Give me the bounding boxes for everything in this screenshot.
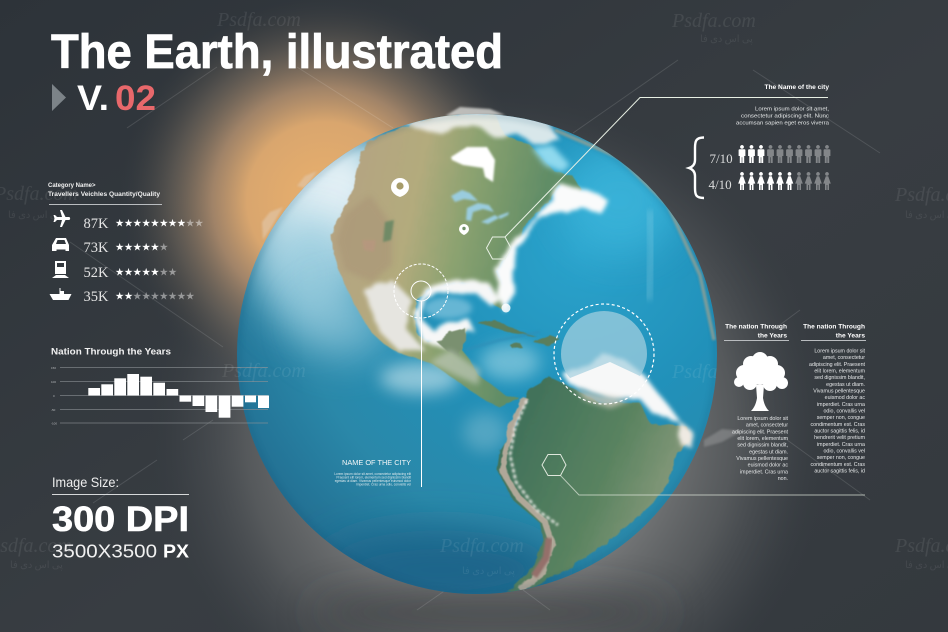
column text: semper non, congue xyxy=(817,455,865,461)
watermark text: پی اس دی فا xyxy=(8,206,61,221)
target marker with leader line xyxy=(394,264,448,487)
column heading: The nation Through xyxy=(725,324,787,330)
stat: ship: 35K xyxy=(84,289,109,305)
axis labels: -100 xyxy=(51,422,57,426)
axis labels xyxy=(51,366,57,426)
column heading: the Years xyxy=(758,332,787,340)
resolution: 300 DPI xyxy=(52,500,189,539)
column text: adipiscing elit. Praesent xyxy=(732,429,789,435)
callout text: Lorem ipsum dolor sit amet, consectetur adipiscing elit xyxy=(334,472,411,476)
heading: Category Name> xyxy=(48,183,96,189)
column text: condimentum est. Cras xyxy=(811,462,865,468)
pale Atlantic bands xyxy=(648,210,652,300)
Caribbean islands xyxy=(477,320,561,348)
Labrador Sea xyxy=(532,145,570,172)
icon: ship xyxy=(50,288,72,300)
column text: auctor sagittis felis, id xyxy=(814,428,865,434)
column text: imperdiet. Cras urna xyxy=(817,402,865,408)
Central America pale land xyxy=(430,350,480,385)
panel: image size xyxy=(52,474,190,562)
column text: odio, convallis vel xyxy=(823,408,865,414)
land: South America xyxy=(497,377,690,593)
stat: car: ★★★★★★ xyxy=(115,242,168,254)
column text: elit lorem, elementum xyxy=(737,436,789,442)
watermark text: پی اس دی فا xyxy=(700,30,753,45)
coastal cloud xyxy=(363,184,606,352)
axis labels: 100 xyxy=(51,380,56,384)
heading xyxy=(48,183,162,205)
callout text: imperdiet. Cras urna odio, convallis vel xyxy=(356,482,411,486)
column text: Vivamus pellentesque xyxy=(736,456,788,462)
city heading: The Name of the city xyxy=(764,84,829,91)
Arctic ice xyxy=(400,114,562,148)
stat: car: 73K xyxy=(84,240,109,256)
column heading: the Years xyxy=(836,332,865,340)
chart heading: Nation Through the Years xyxy=(51,346,171,358)
globe shading rim xyxy=(238,115,716,593)
axis labels: -50 xyxy=(51,408,56,412)
Hudson Bay xyxy=(451,147,495,182)
icon: train xyxy=(52,261,69,278)
axis labels: 0 xyxy=(53,394,55,398)
pictogram: women xyxy=(738,172,831,190)
stat: plane: ★★★★★★★★★★ xyxy=(115,218,203,230)
column text: Lorem ipsum dolor sit xyxy=(737,416,789,422)
column text: condimentum est. Cras xyxy=(811,422,865,428)
city description: Lorem ipsum dolor sit amet, xyxy=(755,106,829,112)
Andes xyxy=(503,397,553,590)
map pin large xyxy=(391,178,409,197)
callout text xyxy=(334,472,412,486)
column text: euismod dolor ac xyxy=(825,395,865,401)
Great Lakes xyxy=(451,190,509,224)
bars xyxy=(88,374,269,418)
column text: semper non, congue xyxy=(817,415,865,421)
column text: auctor sagittis felis, id xyxy=(814,468,865,474)
column heading xyxy=(801,324,866,341)
globe xyxy=(237,108,717,610)
Rocky Mountains terrain xyxy=(341,199,395,280)
watermark over globe: Psdfa.com xyxy=(439,535,524,557)
stat: plane: 87K xyxy=(84,216,109,232)
icon: car xyxy=(52,238,69,251)
stat: ship xyxy=(84,289,195,305)
callout heading: NAME OF THE CITY xyxy=(342,458,411,467)
column text: Lorem ipsum dolor sit xyxy=(814,348,866,354)
column text: egestas ut diam. xyxy=(749,449,788,455)
panel: bar chart xyxy=(51,346,269,426)
column text: adipiscing elit. Praesent xyxy=(809,362,866,368)
watermark over globe xyxy=(221,360,718,577)
hexagon marker south with leader line xyxy=(542,454,865,495)
stat: train: ★★★★★★★ xyxy=(115,266,177,278)
column text: odio, convallis vel xyxy=(823,448,865,454)
watermark over globe: Psdfa.com xyxy=(221,360,306,382)
stat: plane xyxy=(84,216,203,232)
title: The Earth, illustrated xyxy=(51,26,503,79)
watermark over globe: Psdfa xyxy=(671,361,718,383)
clouds over South America xyxy=(563,353,693,448)
column text: hendrerit velit pretium xyxy=(814,435,866,441)
brace xyxy=(689,138,704,198)
callout: name of the city on globe xyxy=(334,458,412,486)
watermark text: پی اس دی فا xyxy=(10,556,63,571)
version label: V. xyxy=(77,79,109,118)
city description xyxy=(736,106,829,126)
cloud wisps outside the globe xyxy=(262,107,742,447)
heading: Travellers Veichles Quantity/Quality xyxy=(48,192,161,198)
pictogram: men xyxy=(739,145,830,163)
column text: imperdiet. Cras urna xyxy=(817,442,865,448)
column text xyxy=(732,416,789,482)
panel: name of the city, top right xyxy=(689,84,831,198)
ratio labels: 4/10 xyxy=(708,177,732,192)
watermark text: Psdfa.com xyxy=(216,9,301,31)
city description: consectetur adipiscing elit. Nunc xyxy=(741,114,829,120)
column heading xyxy=(724,324,789,341)
column text: sed dignissim blandit, xyxy=(737,443,788,449)
Yucatan xyxy=(437,328,465,356)
callout text: egestas ut diam. Vivamus pellentesque euismod dolor xyxy=(335,479,412,483)
panel: nation column with tree xyxy=(724,324,789,482)
stat: car xyxy=(84,240,168,256)
column text: sed dignissim blandit, xyxy=(814,375,865,381)
column text: imperdiet. Cras urna xyxy=(740,469,788,475)
city description: accumsan sapien eget eros viverra xyxy=(736,120,829,126)
column text: amet, consectetur xyxy=(823,355,865,361)
stat: train: 52K xyxy=(84,265,109,281)
ratio labels xyxy=(708,151,733,192)
watermark text: Psdfa.com xyxy=(671,10,756,32)
stat: ship: ★★★★★★★★★ xyxy=(115,290,195,302)
watermark lines xyxy=(70,60,880,610)
ocean shading xyxy=(237,109,680,610)
panel: nation column of text xyxy=(801,324,866,474)
icon: tree xyxy=(734,352,788,411)
column heading: The nation Through xyxy=(803,324,865,330)
column text: amet, consectetur xyxy=(746,423,788,429)
map pin Florida xyxy=(502,304,510,312)
image size label: Image Size: xyxy=(52,474,119,490)
column text: Vivamus pellentesque xyxy=(813,388,865,394)
column text xyxy=(809,348,866,474)
version number: 02 xyxy=(115,79,156,118)
watermark over globe: پی اس دی فا xyxy=(462,562,515,577)
icon: plane xyxy=(54,210,70,227)
pixel size: 3500X3500 xyxy=(52,540,157,562)
Caribbean current xyxy=(488,332,532,344)
highlight circle with dashed ring xyxy=(554,304,654,404)
panel: traveller statistics xyxy=(48,183,203,305)
pixel unit: PX xyxy=(163,540,190,562)
Gulf water xyxy=(424,297,472,319)
column text: elit lorem, elementum xyxy=(814,368,866,374)
column text: egestas ut diam. xyxy=(826,382,865,388)
hexagon marker north with leader line xyxy=(486,98,828,259)
column text: non. xyxy=(778,476,788,482)
land: North America xyxy=(332,115,582,408)
ratio labels: 7/10 xyxy=(710,151,733,166)
version line xyxy=(52,79,156,118)
axis labels: 150 xyxy=(51,366,56,370)
column text: euismod dolor ac xyxy=(748,463,788,469)
stat: train xyxy=(84,265,177,281)
callout text: Praesent elit lorem, elementum sed dignissim blandit xyxy=(336,476,411,480)
arrow icon xyxy=(52,84,66,111)
map pin small xyxy=(459,224,469,235)
tan coast under the clouds xyxy=(575,388,632,408)
